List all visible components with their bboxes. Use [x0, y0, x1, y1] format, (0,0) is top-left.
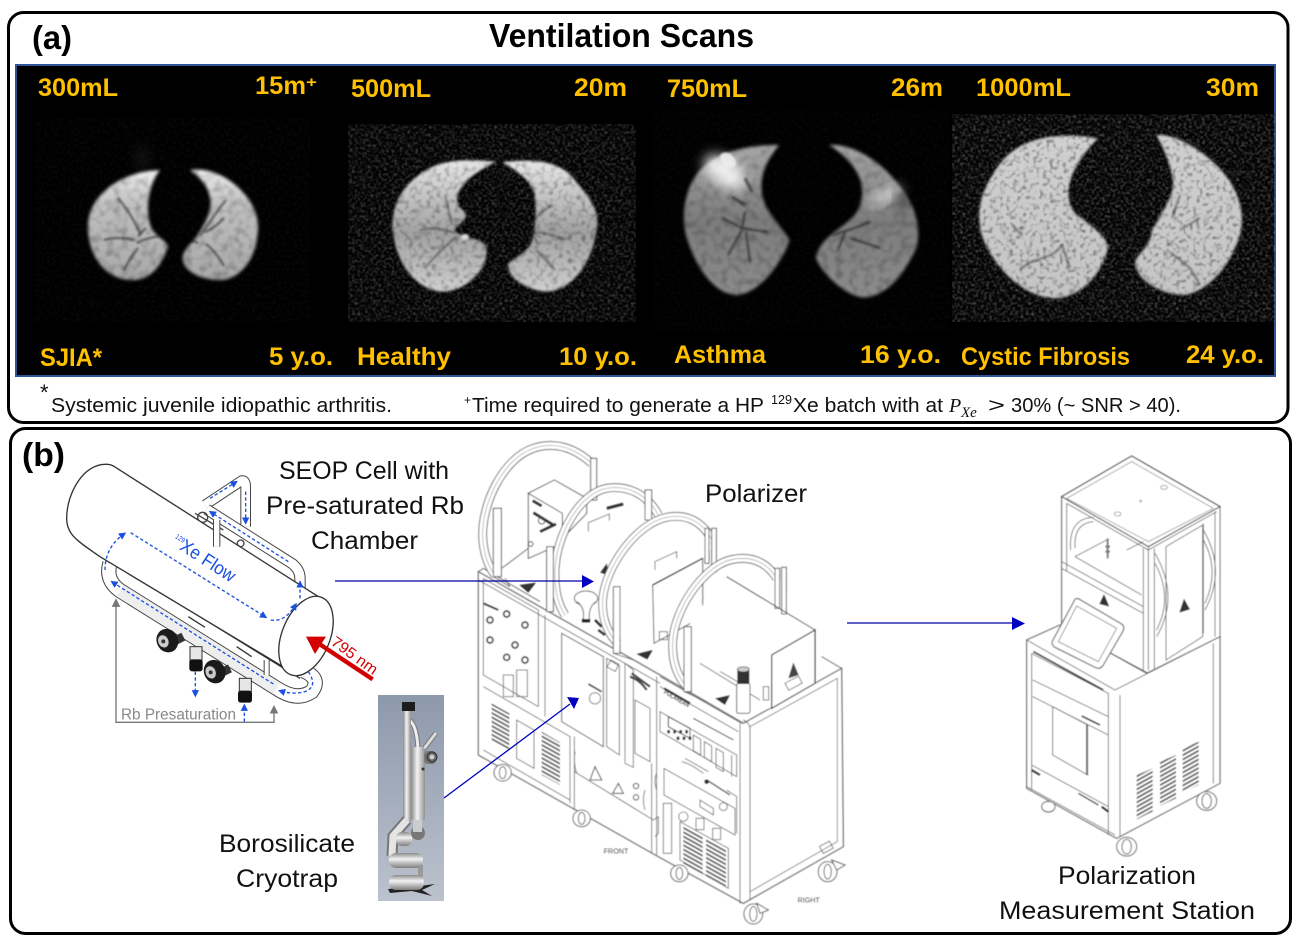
upper box frame: [1062, 456, 1220, 673]
footnote: time required: P: [948, 395, 961, 417]
touch screen: [1052, 598, 1124, 668]
label: RIGHT: RIGHT: [798, 898, 820, 905]
vessels: [1012, 195, 1200, 285]
label: SEOP cell: SEOP Cell with: [279, 457, 449, 485]
faint background noise: [35, 118, 310, 322]
label: cryotrap: Cryotrap: [236, 865, 338, 893]
noisy background: [348, 124, 636, 322]
warning triangles: [1099, 594, 1190, 613]
casters: [1042, 792, 1217, 856]
footnote: SJIA: [40, 380, 392, 417]
panel: (b) hardware: [10, 428, 1290, 934]
red laser arrow: [306, 637, 373, 679]
funnel fixture: [574, 591, 605, 635]
diagram: SEOP cell: [67, 464, 381, 723]
vessels: [420, 195, 565, 270]
volume 300mL: 300mL: [38, 74, 118, 102]
diagram: polarizer: [478, 445, 845, 924]
ring 2 and cylinder: [547, 488, 663, 617]
scan: Cystic Fibrosis 1000mL: [952, 114, 1275, 322]
casters: [494, 764, 845, 924]
shadow: [388, 884, 435, 896]
label: cryotrap: [219, 830, 355, 893]
footnote: time required: [464, 392, 1181, 421]
frame uprights: [1062, 497, 1220, 670]
blue xenon flow paths: [105, 482, 313, 722]
tubes: [409, 720, 418, 750]
cart body: [478, 568, 843, 903]
volume 750mL: 750mL: [667, 75, 747, 103]
label: polarizer: Polarizer: [705, 480, 807, 508]
cell front window: [268, 588, 344, 684]
label: SEOP cell: [266, 457, 464, 555]
image: borosilicate cryotrap: [378, 695, 444, 901]
gray presaturation path: [116, 600, 274, 723]
footnote: SJIA: *: [40, 380, 49, 405]
faint background noise: [653, 110, 950, 332]
panel label (b): (b): [22, 436, 65, 473]
noisy background: [952, 114, 1275, 322]
label: SEOP cell: Pre-saturated Rb: [266, 492, 464, 520]
bright and dark patches: [698, 148, 907, 209]
upper coil arcs: [1070, 517, 1215, 637]
ring 3 and cylinder panel: [603, 516, 716, 660]
lungs image: [88, 169, 258, 280]
left panel details: [478, 578, 660, 855]
label: 129Xe flow: Xe Flow: [176, 535, 240, 586]
stub fittings and wheels: [153, 625, 252, 703]
footnote: time required: 129: [771, 392, 792, 407]
footnote: time required: Xe batch with at: [793, 395, 943, 417]
rear pipes: [195, 481, 300, 599]
condition Asthma: Asthma: [674, 341, 767, 369]
yellow scan labels: [38, 72, 1264, 372]
lungs image: [979, 135, 1242, 298]
label: SEOP cell: Chamber: [311, 527, 418, 555]
footnote: time required: >: [988, 395, 1005, 417]
footnote: SJIA: Systemic juvenile idiopathic arthritis.: [51, 395, 392, 417]
footnote: time required: Xe: [960, 405, 977, 421]
base cabinet: [1027, 625, 1220, 838]
arrow: cryotrap to polarizer: [444, 697, 579, 798]
diagram: polarization measurement station: [1027, 456, 1220, 856]
scan: Asthma 750mL: [653, 110, 950, 332]
panel: (a) ventilation scans: [8, 12, 1288, 422]
front control panel: [653, 677, 742, 888]
glass cell cylinder: [67, 464, 320, 675]
age 10: 10 y.o.: [559, 343, 637, 371]
condition Healthy: Healthy: [357, 343, 451, 371]
lower rail and pipe: [109, 563, 315, 696]
footnote: time required: 30% (~ SNR > 40).: [1011, 395, 1181, 417]
bright spot: [461, 234, 469, 240]
scan: Healthy 500mL: [348, 124, 636, 322]
condition Cystic Fibrosis: Cystic Fibrosis: [961, 343, 1130, 371]
label: measurement station: Measurement Station: [999, 897, 1255, 925]
trap coils: [389, 820, 425, 890]
footnote: time required: +: [464, 393, 471, 407]
age 5: 5 y.o.: [269, 343, 333, 371]
airway vessels: [104, 198, 226, 270]
panel label (a): (a): [32, 19, 72, 56]
ring 4 and end box: [673, 558, 815, 717]
lungs image: [392, 160, 597, 292]
warning triangle: [788, 662, 799, 678]
arrow: cell to polarizer: [335, 575, 594, 588]
label: 129Xe flow: 129: [174, 532, 187, 545]
presaturation label: Rb Presaturation: [121, 706, 236, 723]
upper stub tube: [217, 520, 267, 675]
beacon: [737, 667, 750, 713]
label: 795 nm: 795 nm: [328, 633, 381, 679]
time 20m: 20m: [574, 74, 627, 102]
dim halo above lungs: [135, 146, 149, 170]
right panel details: [740, 678, 837, 903]
volume 1000mL: 1000mL: [976, 74, 1071, 102]
age 16: 16 y.o.: [860, 341, 941, 369]
plus marker: +: [306, 74, 317, 91]
time 30m: 30m: [1206, 74, 1259, 102]
label: measurement station: [999, 862, 1255, 925]
scan strip background: [16, 65, 1275, 376]
arrow: polarizer to station: [847, 617, 1025, 630]
label: measurement station: Polarization: [1058, 862, 1196, 890]
time 15m+: 15m: [255, 72, 306, 100]
ring 1 and control box: [483, 445, 597, 593]
volume 500mL: 500mL: [351, 75, 431, 103]
lungs image: [684, 145, 918, 297]
footnote: time required: Time required to generate a HP: [472, 395, 764, 417]
vessels: [722, 212, 880, 262]
condition SJIA: SJIA*: [40, 344, 102, 372]
scan: SJIA 300mL: [35, 118, 310, 322]
title: Ventilation Scans: [489, 17, 754, 54]
top face: [1062, 456, 1220, 550]
label: FRONT: FRONT: [604, 849, 629, 856]
time 26m: 26m: [891, 74, 943, 102]
age 24: 24 y.o.: [1186, 341, 1264, 369]
polarizer brand: POLAREAN: [662, 687, 691, 709]
label: cryotrap: Borosilicate: [219, 830, 355, 858]
probe: [1105, 538, 1110, 558]
